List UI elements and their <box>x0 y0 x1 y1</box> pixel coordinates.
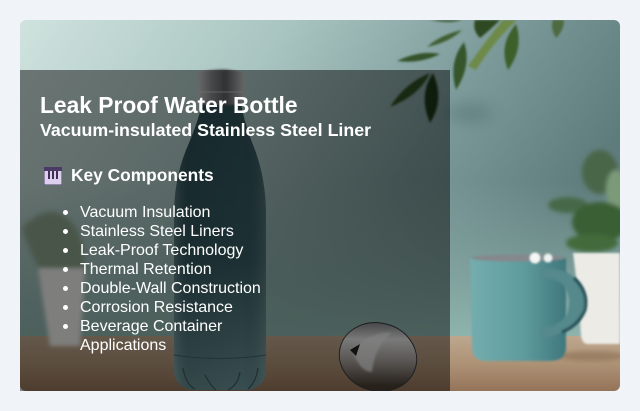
wall <box>20 20 620 340</box>
icon: piano keys <box>44 167 62 185</box>
white pot <box>573 253 620 344</box>
bottle <box>174 69 266 390</box>
list: key components: Corrosion Resistance <box>80 299 233 316</box>
table <box>20 336 620 391</box>
mug <box>470 252 626 361</box>
list: key components: Stainless Steel Liners <box>80 223 234 240</box>
title: Leak Proof Water Bottle <box>40 92 298 118</box>
list: key components: Double-Wall Construction <box>80 280 261 297</box>
leaves: top branch <box>390 20 564 123</box>
subtitle: Vacuum-insulated Stainless Steel Liner <box>40 120 371 140</box>
right plant <box>548 150 628 252</box>
dark text overlay panel <box>20 70 450 391</box>
list: key components <box>63 204 261 354</box>
list: key components: Vacuum Insulation <box>80 204 210 221</box>
left plant and pot <box>22 212 85 346</box>
heading: key components: Key Components <box>71 165 214 185</box>
list: key components: Beverage Container Applications <box>80 318 222 354</box>
list: key components: Leak-Proof Technology <box>80 242 243 259</box>
list: key components: Thermal Retention <box>80 261 212 278</box>
metal ball <box>332 314 424 400</box>
